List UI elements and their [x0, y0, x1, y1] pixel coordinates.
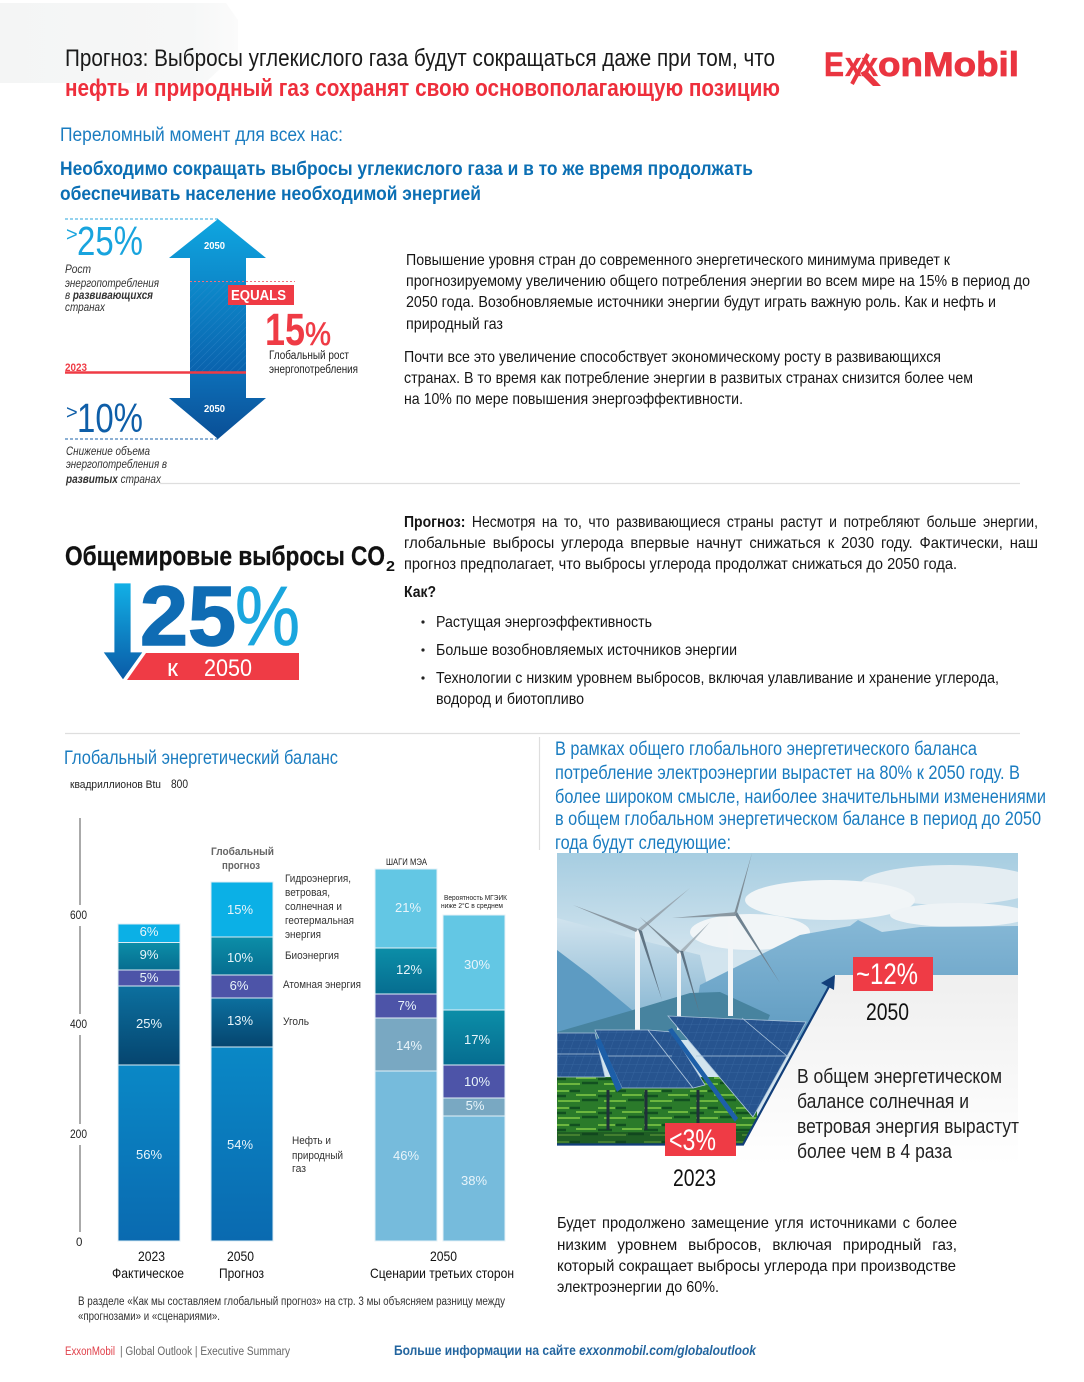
legend labels: Биоэнергия: [285, 950, 339, 962]
x axis labels: Фактическое: [112, 1265, 184, 1281]
intro heading: Необходимо сокращать выбросы углекислого газа и в то же время продолжать: [60, 159, 753, 180]
x axis labels: Прогноз: [219, 1265, 264, 1281]
text block: solar and wind: балансе солнечная и: [797, 1091, 969, 1113]
bullet list: Технологии с низким уровнем выбросов, включая улавливание и хранение углерода,: [436, 670, 999, 687]
legend labels: Уголь: [283, 1016, 309, 1028]
values: 2050 IPCC below 2C: 5%: [466, 1098, 485, 1113]
column headers: Вероятность МГЭИК: [444, 895, 508, 902]
callout: 2050 share: ~12%: [856, 958, 918, 991]
bar: 2050 IPCC below 2C: [443, 915, 505, 1241]
bar: 2050 IEA STEPS: [375, 869, 437, 1241]
arrow down: [169, 372, 266, 439]
logo: ExxonMobil: xx: [845, 46, 878, 84]
legend labels: газ: [292, 1163, 306, 1175]
icon: 25% reduction by 2050: %: [235, 569, 300, 663]
stat: developing countries growth: Рост: [65, 264, 91, 276]
values: 2050 outlook: 54%: [227, 1137, 253, 1152]
text block: energy growth: [404, 252, 1030, 408]
stat: developed countries decline: [65, 395, 167, 486]
text block: outlook: Как?: [404, 584, 436, 601]
values: 2050 IPCC below 2C: 30%: [464, 957, 490, 972]
legend labels: ветровая,: [285, 887, 330, 899]
x axis labels: 2050: [430, 1248, 457, 1264]
bar: 2050 outlook: [211, 882, 273, 1241]
column headers: [211, 846, 508, 910]
values: 2023 actual: 5%: [140, 970, 159, 985]
legend labels: геотермальная: [285, 915, 354, 927]
callout: equals 15%: %: [305, 316, 331, 352]
column headers: ШАГИ МЭА: [386, 857, 427, 867]
stat: developing countries growth: >: [66, 224, 78, 246]
text block: solar and wind: [797, 1066, 1019, 1163]
values: 2050 outlook: 15%: [227, 902, 253, 917]
text block: electricity demand: [555, 739, 1046, 854]
logo: ExxonMobil: onMobil: [878, 46, 1019, 84]
title: нефть и природный газ сохранят свою основополагающую позицию: [65, 75, 780, 102]
callout: 2050 share: [853, 957, 933, 1026]
stat: developing countries growth: энергопотребления: [65, 278, 159, 290]
x axis labels: 2050: [227, 1248, 254, 1264]
column headers: Глобальный: [211, 846, 274, 858]
heading: global CO2 emissions: Общемировые выбросы CO: [65, 541, 385, 571]
values: 2050 IPCC below 2C: 10%: [464, 1074, 490, 1089]
energy demand arrow diagram: 2023: [65, 362, 87, 374]
arrow up: [169, 219, 266, 372]
callout: equals 15%: энергопотребления: [269, 364, 358, 376]
text block: energy growth: странах. В то время как потребление энергии в развитых странах снизится более чем: [404, 370, 973, 387]
bullet list: Больше возобновляемых источников энергии: [436, 642, 737, 659]
legend labels: солнечная и: [285, 901, 342, 913]
text block: energy growth: на 10% по мере повышения энергоэффективности.: [404, 391, 743, 408]
values: 2050 outlook: 13%: [227, 1013, 253, 1028]
callout: 2023 share: <3%: [669, 1124, 716, 1157]
column headers: ниже 2°C в среднем: [441, 902, 503, 910]
chart: global energy balance: [70, 779, 514, 1281]
bullet list: водород и биотопливо: [436, 691, 584, 708]
y axis: 0: [76, 1237, 82, 1249]
text block: coal substitution: электроэнергии до 60%.: [557, 1279, 719, 1296]
bar: 2023 actual: [118, 924, 180, 1241]
text block: solar and wind: более чем в 4 раза: [797, 1141, 953, 1163]
heading: global CO2 emissions: 2: [386, 558, 395, 575]
values: 2050 outlook: 6%: [230, 978, 249, 993]
footer: ExxonMobil: [65, 1346, 115, 1358]
title: Прогноз: Выбросы углекислого газа будут сокращаться даже при том, что: [65, 45, 775, 72]
footer: | Global Outlook | Executive Summary: [120, 1346, 290, 1358]
stat: developed countries decline: энергопотребления в: [66, 459, 167, 471]
values: 2050 outlook: 10%: [227, 950, 253, 965]
callout: 2050 share: 2050: [866, 999, 909, 1026]
text block: electricity demand: потребление электроэнергии вырастет на 80% к 2050 году. В: [555, 763, 1020, 784]
solar panels: [557, 1016, 806, 1117]
text block: coal substitution: низким уровнем выбросов, включая природный газ,: [557, 1237, 957, 1254]
heading: global energy balance: Глобальный энергетический баланс: [64, 748, 338, 769]
y axis: 600: [70, 910, 87, 922]
values: 2050 IPCC below 2C: 17%: [464, 1032, 490, 1047]
column headers: прогноз: [222, 860, 260, 872]
arrow: solar and wind growth: [557, 975, 835, 1144]
energy demand arrow diagram: 2050: [204, 403, 225, 415]
y axis: квадриллионов Btu: [70, 779, 161, 791]
text block: energy growth: природный газ: [406, 316, 503, 333]
title: [65, 45, 780, 102]
stat: developing countries growth: [65, 218, 159, 314]
x axis labels: 2023: [138, 1248, 165, 1264]
legend labels: [283, 873, 361, 1175]
icon: 25% reduction by 2050: [103, 569, 300, 682]
callout: equals 15%: [228, 285, 358, 376]
stat: developing countries growth: в развивающихся: [65, 290, 153, 302]
values: 2023 actual: 6%: [140, 924, 159, 939]
logo: ExxonMobil: [824, 46, 1019, 86]
values: 2050 IEA STEPS: 12%: [396, 962, 422, 977]
chart footnote: В разделе «Как мы составляем глобальный прогноз» на стр. 3 мы объясняем разницу между: [78, 1296, 505, 1308]
text block: outlook: [404, 514, 1038, 601]
intro heading: Переломный момент для всех нас:: [60, 125, 343, 146]
values: 2023 actual: 25%: [136, 1016, 162, 1031]
y axis: [70, 779, 188, 1249]
chart footnote: [78, 1296, 505, 1323]
grass: [557, 1077, 757, 1144]
y axis: 800: [171, 779, 188, 791]
stat: developing countries growth: 25%: [77, 218, 143, 264]
values: 2050 IPCC below 2C: [461, 957, 490, 1188]
legend labels: Нефть и: [292, 1135, 331, 1147]
x axis labels: Сценарии третьих сторон: [370, 1265, 514, 1281]
bullet list: [421, 614, 999, 708]
text block: outlook: прогноз предполагает, что выбросы углерода продолжат снижаться до 2050 года.: [404, 556, 957, 573]
callout: equals 15%: EQUALS: [231, 288, 286, 304]
text block: coal substitution: Будет продолжено замещение угля источниками с более: [557, 1215, 957, 1232]
text block: electricity demand: В рамках общего глобального энергетического баланса: [555, 739, 977, 760]
energy demand arrow diagram: [65, 219, 295, 439]
y axis: 400: [70, 1019, 87, 1031]
footer: [65, 1342, 757, 1358]
footer: Больше информации на сайте exxonmobil.com/globaloutlook: [394, 1342, 757, 1358]
stat: developed countries decline: развитых странах: [65, 474, 162, 486]
logo: ExxonMobil: E: [824, 46, 844, 84]
x axis labels: [112, 1248, 514, 1281]
grey backdrop behind solar and wind stats: [730, 975, 1018, 1165]
energy demand arrow diagram: 2050: [204, 240, 225, 252]
values: 2023 actual: 56%: [136, 1147, 162, 1162]
turbines: [573, 853, 780, 1030]
values: 2023 actual: 9%: [140, 947, 159, 962]
stat: developed countries decline: >: [66, 402, 78, 424]
legend labels: энергия: [285, 929, 321, 941]
y axis: 200: [70, 1129, 87, 1141]
values: 2050 IEA STEPS: 14%: [396, 1038, 422, 1053]
text block: solar and wind: ветровая энергия вырастут: [797, 1116, 1019, 1138]
text block: energy growth: Повышение уровня стран до современного энергетического минимума приведет к: [406, 252, 951, 269]
callout: equals 15%: Глобальный рост: [269, 350, 350, 362]
stat: developed countries decline: 10%: [77, 395, 143, 441]
callout: equals 15%: 15: [265, 304, 305, 355]
text block: coal substitution: который сокращает выбросы углерода при производстве: [557, 1258, 956, 1275]
legend labels: природный: [292, 1150, 343, 1162]
values: 2023 actual: [136, 924, 162, 1162]
icon: 25% reduction by 2050: к: [167, 655, 179, 682]
legend labels: Атомная энергия: [283, 979, 361, 991]
values: 2050 IEA STEPS: 7%: [398, 998, 417, 1013]
intro heading: [60, 125, 753, 205]
text block: coal substitution: [557, 1215, 957, 1296]
icon: 25% reduction by 2050: 2050: [204, 655, 252, 682]
stat: developed countries decline: Снижение объема: [66, 446, 150, 458]
values: 2050 IEA STEPS: [393, 900, 422, 1163]
photo: wind turbines and solar panels: [557, 853, 1040, 1144]
values: 2050 IEA STEPS: 46%: [393, 1148, 419, 1163]
values: 2050 IPCC below 2C: 38%: [461, 1173, 487, 1188]
chart footnote: «прогнозами» и «сценариями».: [78, 1311, 220, 1323]
intro heading: обеспечивать население необходимой энергией: [60, 184, 481, 205]
text block: electricity demand: года будут следующие:: [555, 833, 731, 854]
stat: developing countries growth: странах: [65, 302, 106, 314]
text block: solar and wind: В общем энергетическом: [797, 1066, 1002, 1088]
text block: energy growth: 2050 года. Возобновляемые источники энергии будут играть важную роль. Как и нефть и: [406, 294, 996, 311]
text block: energy growth: Почти все это увеличение способствует экономическому росту в развивающихся: [404, 349, 941, 366]
decorative corner tint: [0, 3, 238, 83]
bullet list: Растущая энергоэффективность: [436, 614, 652, 631]
callout: 2023 share: [665, 1123, 736, 1192]
values: 2050 outlook: [227, 902, 253, 1152]
legend labels: Гидроэнергия,: [285, 873, 351, 885]
icon: 25% reduction by 2050: 25: [140, 569, 236, 663]
text block: outlook: глобальные выбросы углерода впервые начнут снижаться к 2030 году. Фактически, наш: [404, 535, 1038, 552]
values: 2050 IEA STEPS: 21%: [395, 900, 421, 915]
callout: 2023 share: 2023: [673, 1165, 716, 1192]
